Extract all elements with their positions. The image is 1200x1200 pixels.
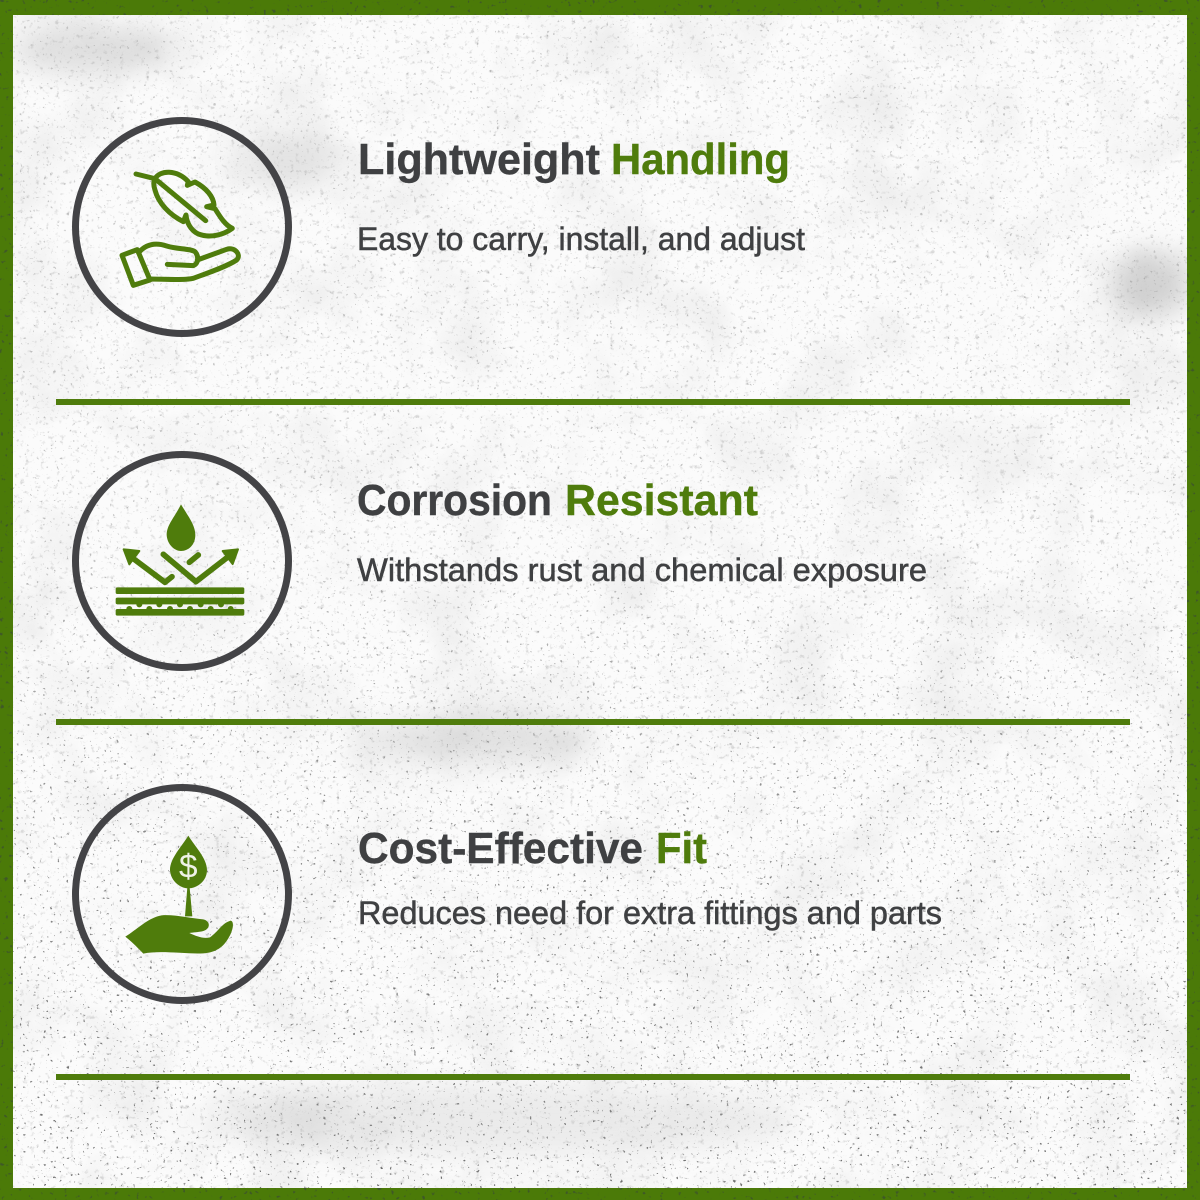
heading: Corrosion Resistant (357, 476, 758, 525)
divider 3 (56, 1074, 1130, 1080)
divider 2 (56, 719, 1130, 725)
heading: Cost-Effective Fit: Cost-Effective (358, 824, 643, 873)
panel: cost-effective fit (76, 788, 942, 1000)
heading: Corrosion Resistant: Corrosion (357, 476, 552, 525)
icon: water drop repelled from layered surface (76, 454, 288, 668)
panel: corrosion resistant (76, 454, 927, 668)
heading: Lightweight Handling (358, 135, 790, 184)
heading: Corrosion Resistant: Resistant (565, 476, 758, 525)
text: Reduces need for extra fittings and parts: Reduces need for extra fittings and parts (358, 895, 942, 931)
text: Withstands rust and chemical exposure: Withstands rust and chemical exposure (357, 552, 927, 588)
icon: feather over open hand (76, 120, 288, 334)
heading: Lightweight Handling: Handling (611, 135, 790, 184)
panel: lightweight handling (76, 120, 805, 334)
heading: Lightweight Handling: Lightweight (358, 135, 600, 184)
icon: hand with dollar seedling (76, 788, 288, 1000)
divider 1 (56, 399, 1130, 405)
icon: hand with dollar seedling: $ (179, 849, 198, 886)
text: Easy to carry, install, and adjust: Easy to carry, install, and adjust (357, 221, 805, 257)
heading: Cost-Effective Fit: Fit (656, 824, 707, 873)
